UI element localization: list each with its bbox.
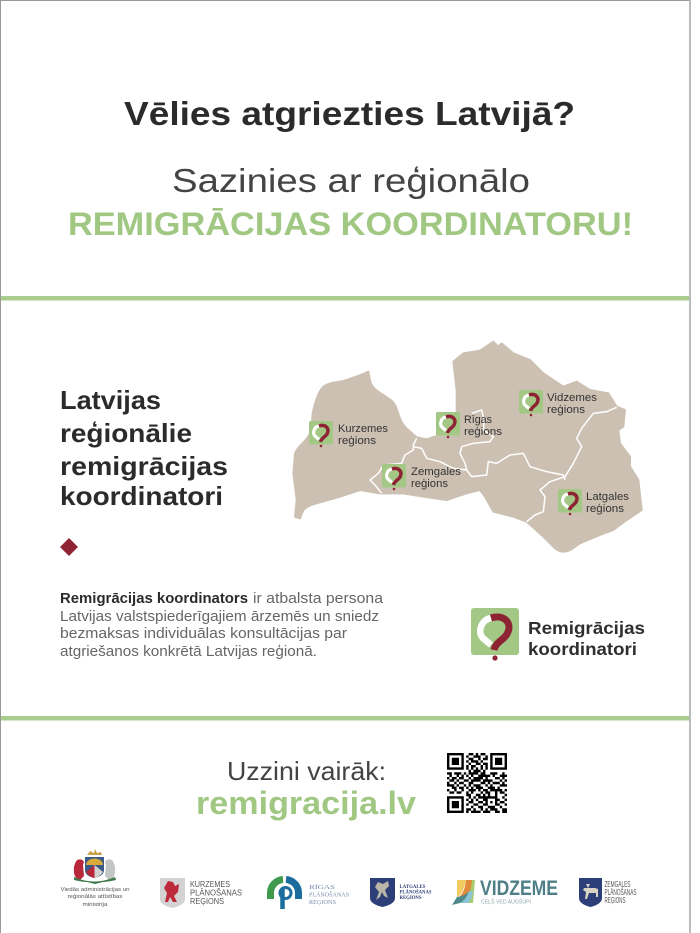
marker: Kurzeme: reģions <box>338 434 377 447</box>
marker: Kurzeme: Kurzemes <box>338 423 388 435</box>
logo: Kurzeme planning region: PLĀNOŠANAS <box>190 888 242 898</box>
region borders <box>370 407 617 522</box>
logo: Kurzeme planning region: KURZEMES <box>190 880 230 889</box>
logo: ministry coat of arms: ministrija <box>82 902 108 908</box>
heading: regional coordinators: reģionālie <box>60 418 192 448</box>
description paragraph <box>60 591 384 660</box>
logo: Latgale planning region: PLĀNOŠANAS <box>400 890 432 896</box>
icon: coat of arms <box>74 849 116 884</box>
logo: Kurzeme planning region: REĢIONS <box>190 897 224 906</box>
website link: remigracija.lv <box>196 785 416 821</box>
heading: regional coordinators: Latvijas <box>60 385 161 415</box>
logo: Latgale planning region <box>370 878 432 907</box>
logo: Latgale planning region: LATGALES <box>400 885 426 890</box>
logo: Remigrācijas koordinatori: Remigrācijas <box>528 618 645 638</box>
icon: diamond <box>60 538 78 556</box>
heading: regional coordinators: koordinatori <box>60 481 223 511</box>
marker: Latgale: Latgales <box>586 491 630 503</box>
map of Latvia <box>293 342 642 552</box>
description paragraph: Remigrācijas koordinators <box>60 591 248 607</box>
logo: Kurzeme planning region <box>160 878 242 908</box>
marker: Vidzeme <box>519 390 598 416</box>
logo: Riga planning region: RĪGAS <box>309 884 335 891</box>
highlighted subtitle: REMIGRĀCIJAS KOORDINATORU! <box>68 206 633 242</box>
marker: Latgale <box>558 489 630 515</box>
logo: Zemgale planning region <box>579 878 636 907</box>
heading: regional coordinators <box>60 385 228 511</box>
logo: ministry coat of arms <box>60 849 130 908</box>
logo: ministry coat of arms: reģionālās attīstības <box>68 893 123 900</box>
subtitle: Sazinies ar reģionālo <box>172 162 530 199</box>
logo: Riga planning region: PLĀNOŠANAS <box>309 890 349 898</box>
logo: Zemgale planning region: ZEMGALES <box>604 880 630 889</box>
marker: Zemgale: reģions <box>411 477 449 490</box>
logo: Riga planning region: REĢIONS <box>309 899 336 906</box>
title: Vēlies atgriezties Latvijā? <box>124 95 575 132</box>
marker: Kurzeme <box>309 421 388 447</box>
logo: Vidzeme <box>452 877 558 906</box>
marker: Riga: Rīgas <box>464 414 492 426</box>
marker: Zemgale <box>382 464 462 490</box>
marker: Vidzeme: reģions <box>547 403 586 416</box>
logo: Riga planning region <box>270 880 349 909</box>
marker: Riga <box>436 412 503 438</box>
logo: Vidzeme: CEĻŠ VED AUGŠUPI <box>481 898 531 906</box>
call to action: Uzzini vairāk: <box>227 756 386 786</box>
heading: regional coordinators: remigrācijas <box>60 451 228 481</box>
logo: Vidzeme: VIDZEME <box>480 877 558 900</box>
map shape <box>293 342 642 552</box>
marker: Vidzeme: Vidzemes <box>547 392 598 404</box>
description paragraph: atgriešanos konkrētā Latvijas reģionā. <box>60 644 317 660</box>
logo: Zemgale planning region: PLĀNOŠANAS <box>604 888 636 897</box>
QR code <box>447 754 507 812</box>
logo: Remigrācijas koordinatori: koordinatori <box>528 639 637 659</box>
logo: Remigrācijas koordinatori <box>471 608 645 661</box>
marker: Riga: reģions <box>464 425 503 438</box>
description paragraph: bezmaksas individuālas konsultācijas par <box>60 626 347 642</box>
logo: Latgale planning region: REĢIONS <box>400 896 422 901</box>
marker: Zemgale: Zemgales <box>411 466 462 478</box>
description paragraph: ir atbalsta persona <box>253 591 384 607</box>
logo: ministry coat of arms: Viedās administrācijas un <box>60 887 130 893</box>
logo: Zemgale planning region: REĢIONS <box>604 896 626 905</box>
marker: Latgale: reģions <box>586 502 625 515</box>
description paragraph: Latvijas valstspiederīgajiem ārzemēs un sniedz <box>60 609 379 625</box>
